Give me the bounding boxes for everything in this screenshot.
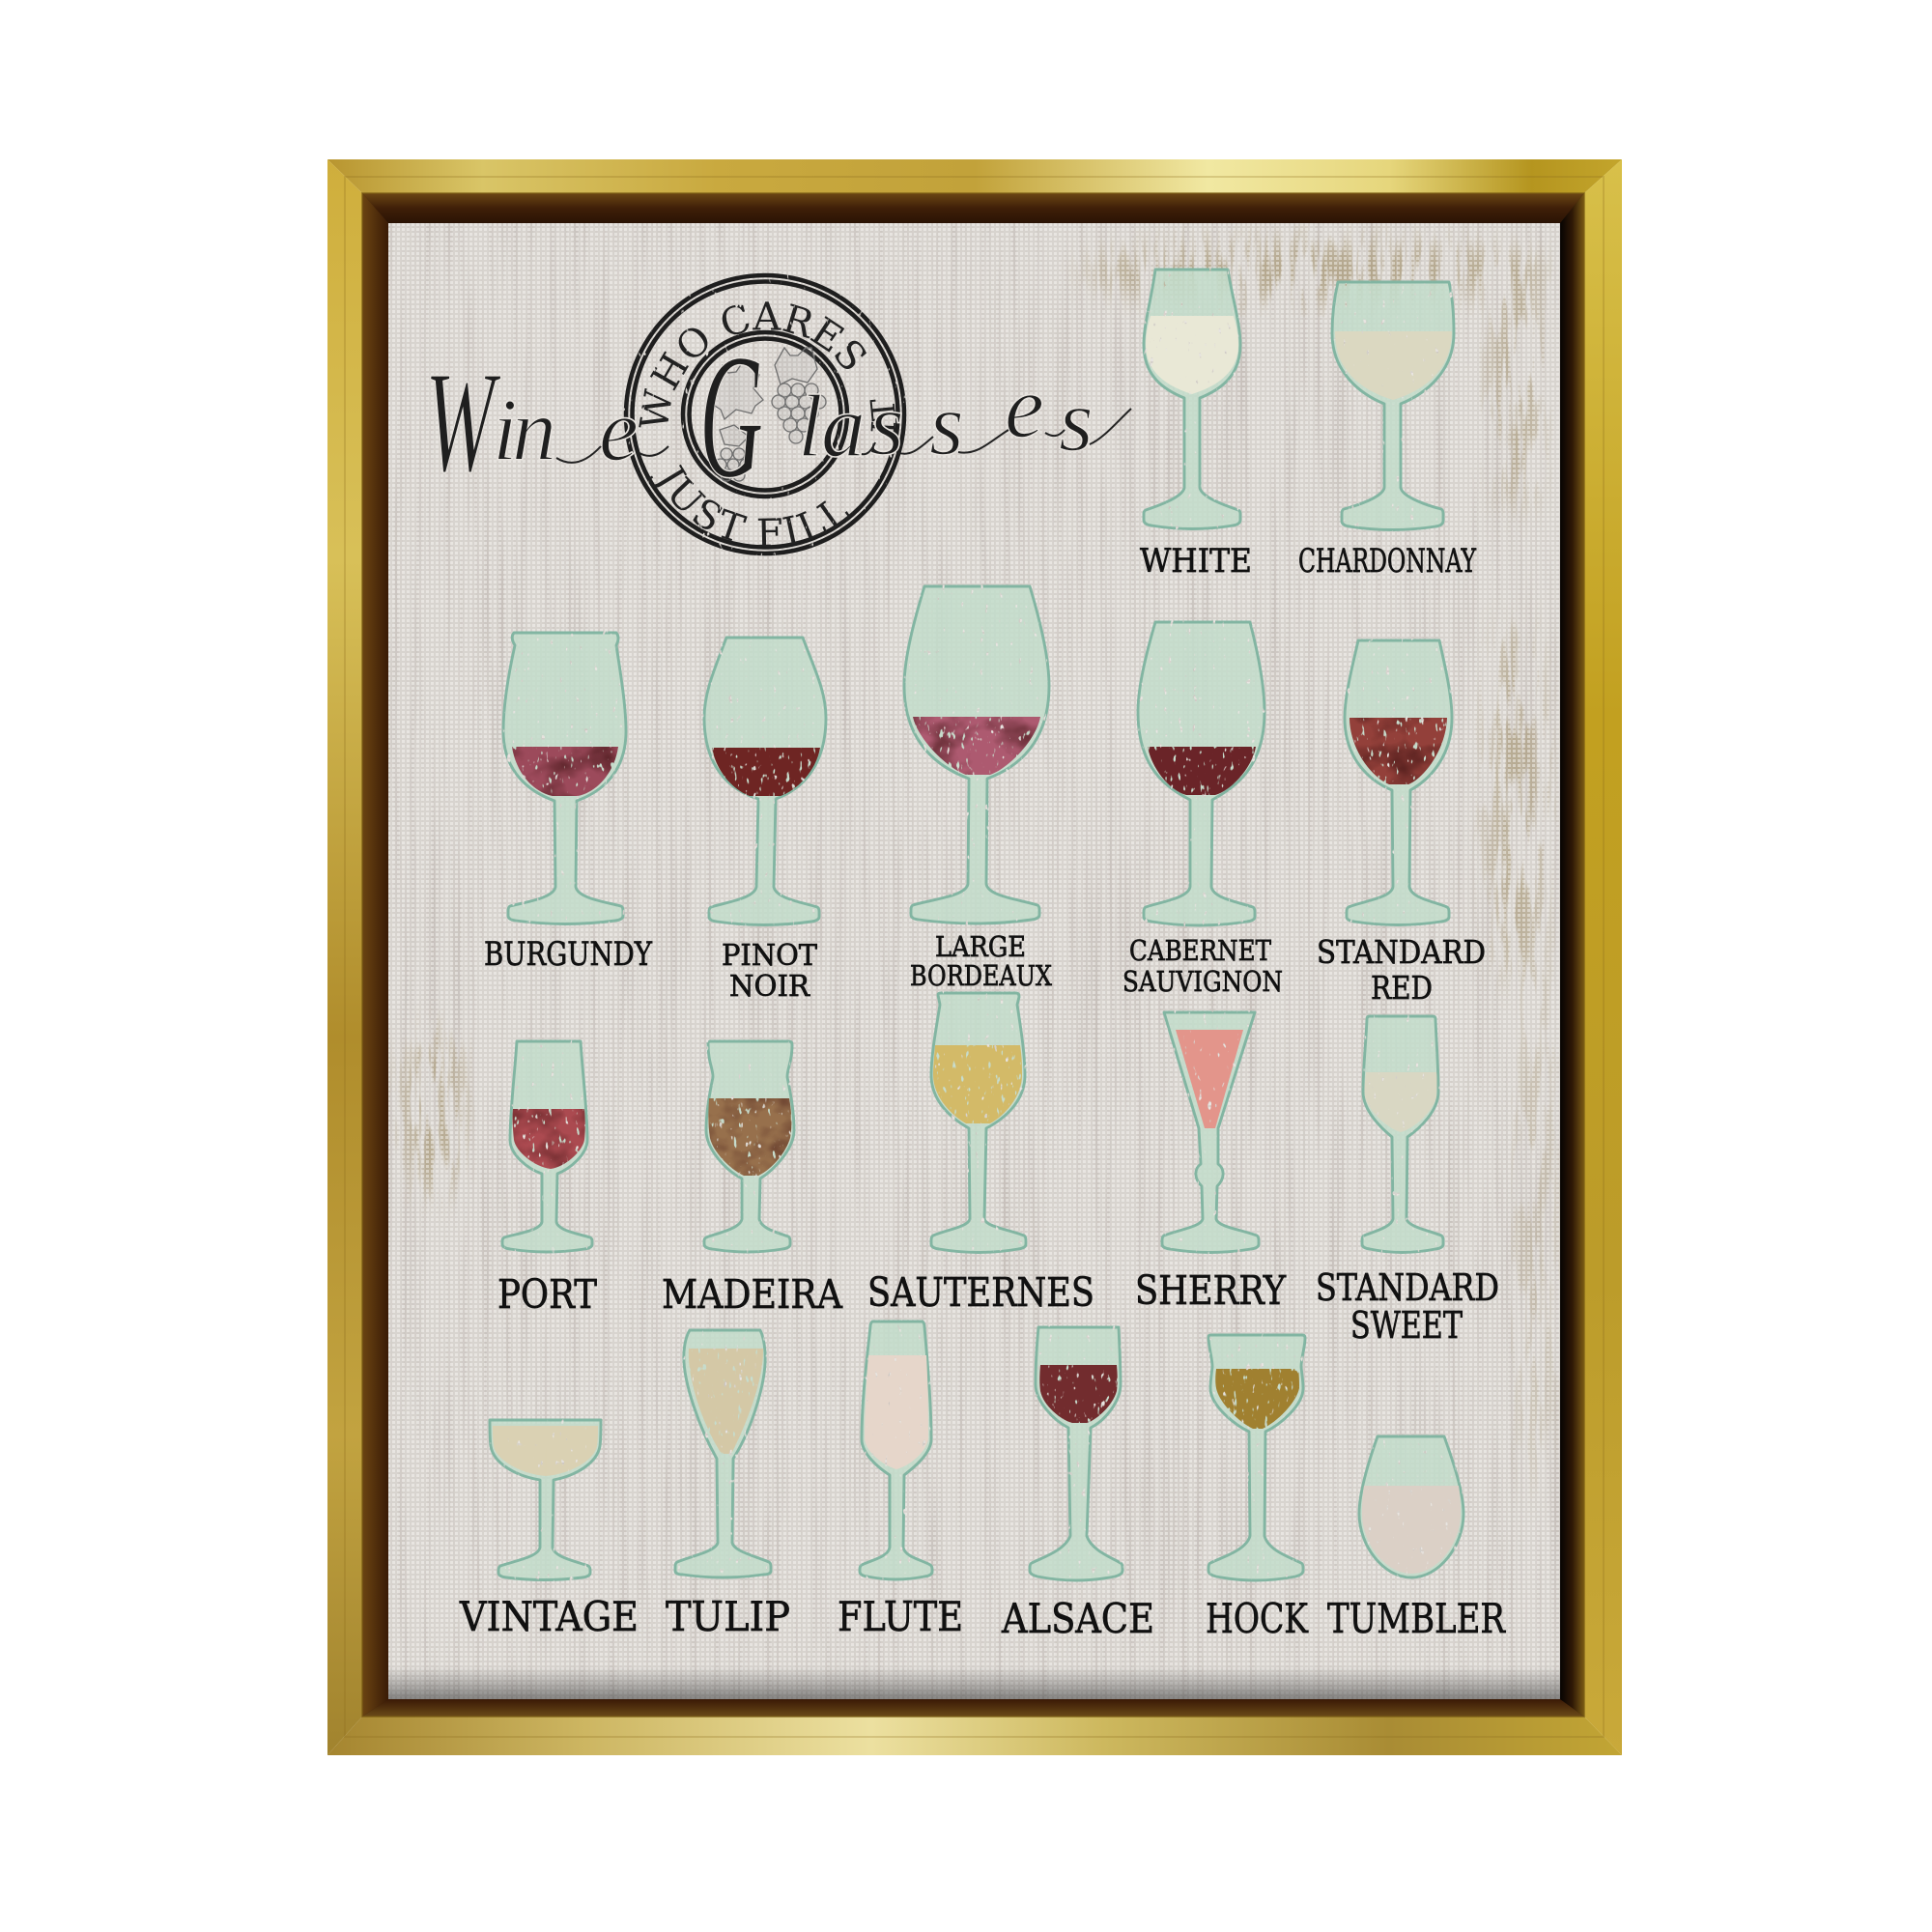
label: large bordeaux: BORDEAUX <box>910 959 1052 992</box>
label: pinot noir: NOIR <box>729 970 810 1004</box>
glass: tulip <box>666 1330 790 1640</box>
stamp: who cares just fill it: IT <box>869 400 895 433</box>
label: standard sweet: SWEET <box>1350 1304 1463 1347</box>
label: pinot noir: PINOT <box>722 939 817 973</box>
glass and wine shape <box>502 1041 592 1252</box>
label: burgundy: BURGUNDY <box>484 935 652 974</box>
icon: grape cluster inside stamp <box>713 348 826 481</box>
glass and wine shape <box>860 1321 932 1579</box>
canvas panel: whitewashed wood and linen texture <box>388 223 1560 1699</box>
glass and wine shape <box>675 1330 771 1577</box>
label: madeira: MADEIRA <box>662 1271 843 1318</box>
glass: chardonnay <box>1298 282 1476 581</box>
glass and wine shape <box>1208 1335 1305 1580</box>
glass: pinot noir <box>704 638 826 1004</box>
label: flute: FLUTE <box>838 1593 963 1640</box>
label: sauternes: SAUTERNES <box>867 1269 1094 1316</box>
label: vintage: VINTAGE <box>459 1593 639 1640</box>
stamp: who cares just fill it: JUST FILL <box>650 464 849 545</box>
label: chardonnay: CHARDONNAY <box>1298 542 1476 581</box>
glass: flute <box>838 1321 963 1640</box>
glass and wine shape <box>1345 640 1452 925</box>
label: cabernet sauvignon: SAUVIGNON <box>1122 965 1283 998</box>
glass: port <box>497 1041 597 1318</box>
glass and wine shape <box>490 1420 601 1580</box>
glass: alsace <box>1001 1327 1154 1642</box>
label: tulip: TULIP <box>666 1593 790 1640</box>
stamp: who cares just fill it <box>624 272 906 556</box>
title: Wine Glasses: G <box>699 318 763 516</box>
label: standard red: RED <box>1371 969 1433 1007</box>
label: standard sweet: STANDARD <box>1316 1266 1499 1309</box>
label: sherry: SHERRY <box>1135 1267 1287 1314</box>
glass: cabernet sauvignon <box>1122 622 1283 998</box>
title: Wine Glasses: lasses <box>798 357 1094 475</box>
title flourish: connecting strokes <box>556 409 1131 463</box>
glass and wine shape <box>1144 270 1240 529</box>
glass and wine shape <box>503 633 626 923</box>
glass and wine shape <box>1138 622 1264 925</box>
label: white: WHITE <box>1140 542 1252 581</box>
glass: madeira <box>662 1041 843 1318</box>
title: Wine Glasses: ine <box>493 381 639 479</box>
glass: large bordeaux <box>904 586 1052 992</box>
gold picture frame <box>327 159 1622 1755</box>
glass and wine shape <box>931 993 1026 1252</box>
glass and wine shape <box>1359 1436 1463 1577</box>
glass: vintage <box>459 1420 639 1640</box>
glass: standard sweet <box>1316 1016 1499 1347</box>
glass and wine shape <box>1162 1012 1259 1252</box>
glass: sauternes <box>867 993 1094 1316</box>
canvas edge shadow <box>388 1666 1560 1699</box>
label: hock: HOCK <box>1206 1595 1309 1642</box>
glass and wine shape <box>904 586 1049 923</box>
glass: burgundy <box>484 633 652 974</box>
label: cabernet sauvignon: CABERNET <box>1129 934 1272 967</box>
glass: tumbler <box>1327 1436 1506 1642</box>
stamp: who cares just fill it: WHO CARES <box>639 301 867 427</box>
label: large bordeaux: LARGE <box>935 930 1026 963</box>
title: Wine Glasses: W <box>425 342 501 502</box>
glass: hock <box>1206 1335 1309 1642</box>
label: tumbler: TUMBLER <box>1327 1595 1506 1642</box>
glass and wine shape <box>704 1041 794 1252</box>
glass and wine shape <box>1332 282 1454 529</box>
glass and wine shape <box>1362 1016 1443 1252</box>
glass and wine shape <box>1030 1327 1122 1580</box>
label: alsace: ALSACE <box>1001 1595 1154 1642</box>
label: standard red: STANDARD <box>1317 933 1486 971</box>
label: port: PORT <box>497 1271 597 1318</box>
title: Wine Glasses <box>425 318 1131 516</box>
glass: sherry <box>1135 1012 1287 1314</box>
glass: standard red <box>1317 640 1486 1007</box>
glass: white <box>1140 270 1252 581</box>
glass and wine shape <box>704 638 826 925</box>
